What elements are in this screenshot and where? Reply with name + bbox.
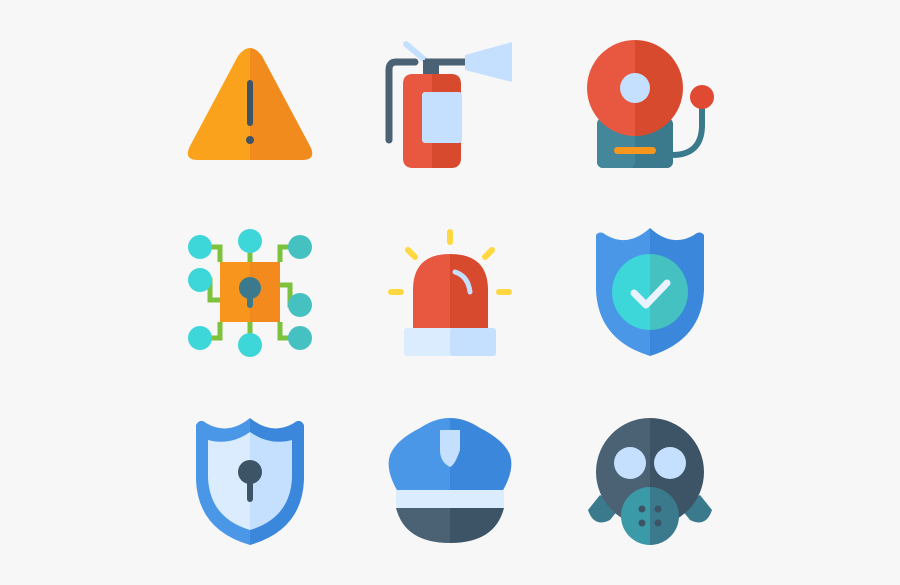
icon: gas mask [588,418,712,545]
icon: fire extinguisher [389,42,512,168]
icon: police hat [389,418,511,543]
icon: circuit lock [188,229,312,357]
icon: warning triangle [188,48,312,160]
icon: siren [391,232,509,356]
icon: shield keyhole [196,418,304,545]
icon: alarm bell [587,40,714,168]
icon: shield check [596,228,704,356]
